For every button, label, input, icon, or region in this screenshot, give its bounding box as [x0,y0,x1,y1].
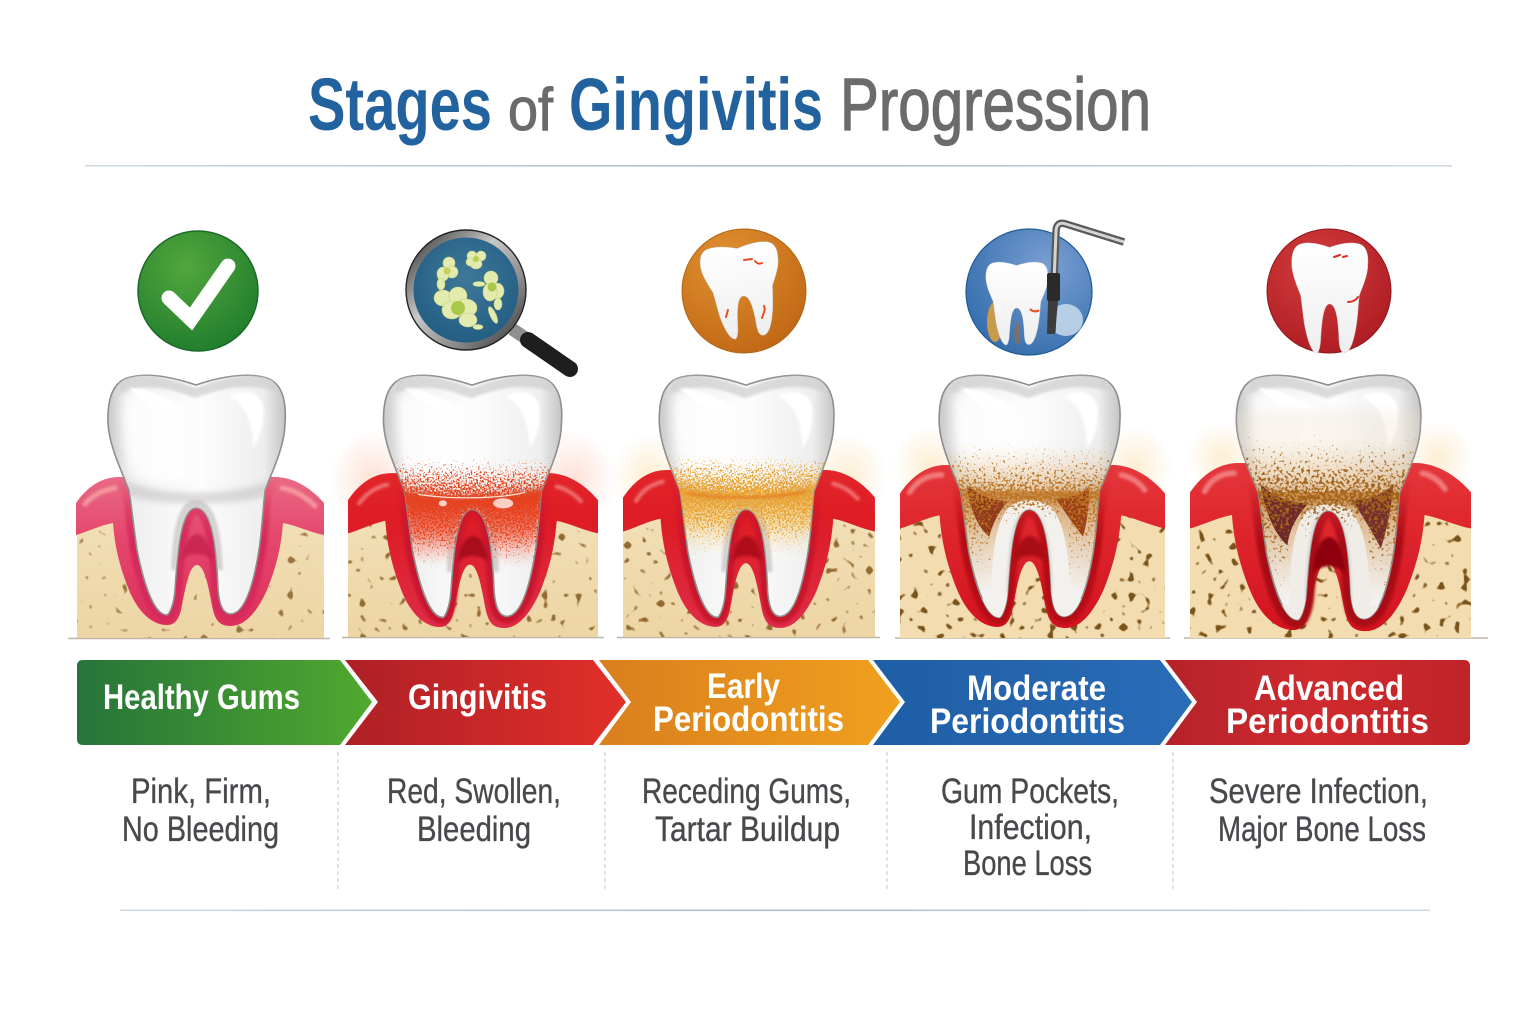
text: early periodontitis description: Receding Gums, [642,772,851,811]
text: gingivitis description: Red, Swollen, [387,772,561,811]
title: Gingivitis [569,63,823,146]
banner: moderate periodontitis: Moderate [967,669,1106,708]
text: moderate periodontitis description: Infection, [969,808,1092,847]
text: healthy description: Pink, Firm, [131,772,271,811]
title: of [508,76,553,143]
icon: blue badge with tooth and probe [966,223,1124,355]
icon: magnifier with bacteria [406,230,570,369]
icon: red tooth badge [1267,229,1391,353]
title [308,63,1151,146]
text: advanced periodontitis description: Major Bone Loss [1218,810,1426,849]
banner: early periodontitis [599,660,900,745]
banner: gingivitis: Gingivitis [408,678,547,717]
banner: moderate periodontitis: Periodontitis [930,702,1125,741]
text: advanced periodontitis description: Severe Infection, [1209,772,1428,811]
title: Progression [840,63,1151,146]
panel: stage 4 moderate periodontitis [892,375,1173,638]
icon: green check [138,231,258,351]
panel: stage 2 gingivitis [329,375,616,638]
text: moderate periodontitis description: Bone Loss [963,844,1092,883]
text: moderate periodontitis description [941,772,1119,883]
text: moderate periodontitis description: Gum Pockets, [941,772,1119,811]
banner: advanced periodontitis: Advanced [1254,669,1404,708]
banner: moderate periodontitis [873,660,1192,745]
text: early periodontitis description [642,772,851,849]
text: gingivitis description: Bleeding [417,810,531,849]
banner: gingivitis [345,660,626,745]
banner: early periodontitis: Early [707,667,780,706]
banner: advanced periodontitis: Periodontitis [1226,702,1429,741]
text: healthy description [122,772,279,849]
title: Stages [308,63,492,146]
panel: stage 5 advanced periodontitis [1184,375,1488,638]
panel: stage 1 healthy tooth [68,375,330,638]
text: gingivitis description [387,772,561,849]
icon: orange tooth badge [682,229,806,353]
banner: healthy gums: Healthy Gums [103,678,300,717]
text: advanced periodontitis description [1209,772,1428,849]
banner: advanced periodontitis [1165,660,1470,745]
banner: early periodontitis: Periodontitis [653,700,844,739]
text: early periodontitis description: Tartar Buildup [655,810,840,849]
panel: stage 3 early periodontitis [610,375,888,638]
text: healthy description: No Bleeding [122,810,279,849]
banner: healthy gums [77,660,372,745]
